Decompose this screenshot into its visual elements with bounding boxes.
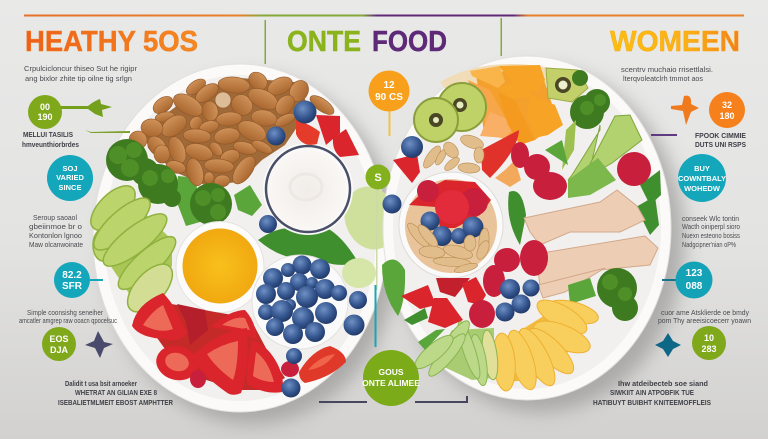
intro text: left: Crpulcicloncur thiseo Sut he rigipr (24, 64, 137, 73)
lower right broccoli (568, 268, 638, 321)
chicken slices (524, 190, 658, 298)
plate: left (83, 64, 406, 412)
plate: right (382, 56, 671, 400)
connector: purple (651, 134, 677, 136)
badge: green 00 190 (28, 95, 62, 129)
text block: bottom left: WHETRAT AN GILIAN EXE 8 (75, 388, 157, 397)
text block: bottom left (58, 379, 173, 407)
connector: orange (388, 110, 390, 136)
badge: green 10 (692, 326, 726, 360)
badge: orange 32 (709, 92, 745, 128)
header rule (24, 14, 744, 16)
strawberries (132, 115, 359, 395)
badge: teal varied: SINCE (59, 183, 81, 192)
connector: navy bottom right (415, 396, 468, 403)
badge: teal 82.2: SFR (62, 281, 83, 292)
leaves (382, 140, 661, 325)
badge: teal buy: WOHEDW (684, 184, 721, 193)
blueberry bowl (252, 100, 367, 398)
badge: teal 82.2 (54, 262, 90, 298)
text block: bottom right: Ihw atdeibecteb soe siand (618, 379, 708, 388)
title: center: ONTE (287, 26, 361, 58)
badge: orange 32: 32 (722, 100, 732, 110)
badge: green EOS (42, 327, 76, 361)
label: food (695, 131, 746, 149)
celery (562, 115, 642, 180)
badge: large green: ONTE ALIMEE (362, 378, 420, 388)
icon: navy spark (85, 331, 113, 358)
badge: green EOS: DJA (50, 345, 68, 355)
cucumber slices (410, 317, 500, 387)
icon: green connector spark (61, 99, 112, 117)
text block: right middle: Nadgcipner'nian oP% (682, 240, 736, 249)
badge: green 00 190: 190 (37, 112, 53, 122)
title: right: WOMEEN (610, 26, 740, 58)
text block: left middle: Maw olcanwoinate (29, 240, 83, 249)
text block: left middle: gbeiinmoe br o (29, 222, 82, 231)
badge: orange 32: 180 (719, 111, 735, 121)
connector: teal (89, 279, 103, 281)
orange melon chunks (468, 65, 563, 187)
sauce bowl (176, 222, 264, 312)
text block: bottom left: ISEBALIETMLMEIT EBOST AMPHTTER (58, 398, 173, 407)
pointer: green (85, 130, 130, 133)
title: center (287, 26, 447, 58)
green leaves (176, 176, 358, 265)
text block: left middle (29, 213, 83, 249)
text block: right lower: pom Thy areeisicoecerr yoawn (658, 316, 751, 325)
badge: teal 82.2: 82.2 (62, 270, 82, 281)
yogurt bowl (263, 143, 353, 235)
broccoli (106, 139, 232, 225)
connector: green vertical (376, 190, 378, 290)
badge: teal varied: SOJ (62, 164, 78, 173)
badge: green S (366, 164, 390, 190)
badge: teal varied (47, 155, 93, 201)
badge: teal buy (678, 154, 726, 202)
broccoli (570, 70, 610, 129)
badge: large green (362, 350, 420, 406)
peach slices (491, 293, 601, 393)
divider: left (264, 20, 266, 64)
badge: teal buy: COWNTBALY (678, 174, 726, 183)
icon: teal spark (655, 333, 681, 357)
badge: teal 123: 088 (686, 281, 703, 292)
almonds (125, 68, 337, 188)
label: mellui tasilis: hmveunthiorbrdes (22, 140, 79, 149)
badge: orange 12: 90 CS (375, 92, 403, 103)
intro text: left (24, 64, 137, 83)
title: left: HEATHY 5OS (25, 26, 198, 58)
badge: green EOS: EOS (49, 334, 69, 344)
badge: teal varied: VARIED (56, 173, 84, 182)
label: mellui tasilis (22, 130, 79, 149)
text block: simple: Simple coonsishg seneiher (27, 308, 103, 317)
badge: teal 123 (676, 262, 712, 298)
text block: bottom left: Dalidit t usa bsit arnoeker (65, 379, 137, 388)
text block: right middle: conseek Wlc tontin (682, 214, 739, 223)
text block: bottom right: HATIBUYT BUIBHT KNITEEMOFFLEIS (593, 398, 711, 407)
apple slices (83, 178, 183, 320)
center-top strawberries and nuts (382, 130, 529, 214)
plate shadows (105, 68, 685, 424)
text block: left middle: Seroup saoaol (33, 213, 77, 222)
badge: green 10: 283 (701, 344, 717, 354)
text block: right middle: Wacth oiniperpl sioro (682, 222, 740, 231)
text block: right lower (658, 308, 751, 325)
text block: right middle (682, 214, 740, 249)
cucumber slices (336, 180, 406, 288)
badge: green S: S (374, 172, 382, 184)
badge: orange 12 (368, 70, 410, 112)
loose blueberries (259, 100, 367, 398)
center bowl (399, 172, 503, 278)
intro text: left: ang bixlor zhite tip oilne tig srlgn (25, 74, 132, 83)
text block: bottom right: SIWKIIT AIN ATPOBFIK TUE (610, 388, 694, 397)
text block: right middle: Nuexn esteono bosiss (682, 231, 740, 240)
title: center: FOOD (372, 26, 447, 58)
text block: left middle: Kontonlon lgnoo (29, 231, 82, 240)
intro text: right: lterqvoleatclrh tmmot aos (623, 74, 703, 83)
intro text: right (621, 65, 713, 83)
text block: right lower: cuor ame Atsklierde oe bmdy (661, 308, 749, 317)
badge: green 10: 10 (704, 333, 714, 343)
badge: teal buy: BUY (694, 164, 710, 173)
connector: teal right (662, 279, 676, 281)
text block: simple (19, 308, 117, 325)
badge: teal 123: 123 (686, 268, 703, 279)
badge: green 00 190: 00 (40, 102, 50, 112)
label: food: DUTS UNI RSPS (695, 140, 746, 149)
lower berries (401, 152, 651, 328)
badge: orange 12: 12 (383, 80, 395, 91)
connector: navy bottom left (319, 401, 367, 403)
intro text: right: scentrv muchaio rrisettlalsi. (621, 65, 713, 74)
badge: large green: GOUS (378, 367, 404, 377)
divider: right (500, 18, 502, 56)
text block: simple: amcatler amgrep raw ooacn qpocelsuc (19, 316, 117, 325)
label: food: FPOOK CIMMIE (695, 131, 746, 140)
icon: orange spark (671, 96, 699, 125)
kiwi slices (414, 68, 588, 142)
connector: teal vertical (374, 285, 376, 347)
label: mellui tasilis: MELLUI TASILIS (23, 130, 73, 139)
text block: bottom right (593, 379, 711, 407)
